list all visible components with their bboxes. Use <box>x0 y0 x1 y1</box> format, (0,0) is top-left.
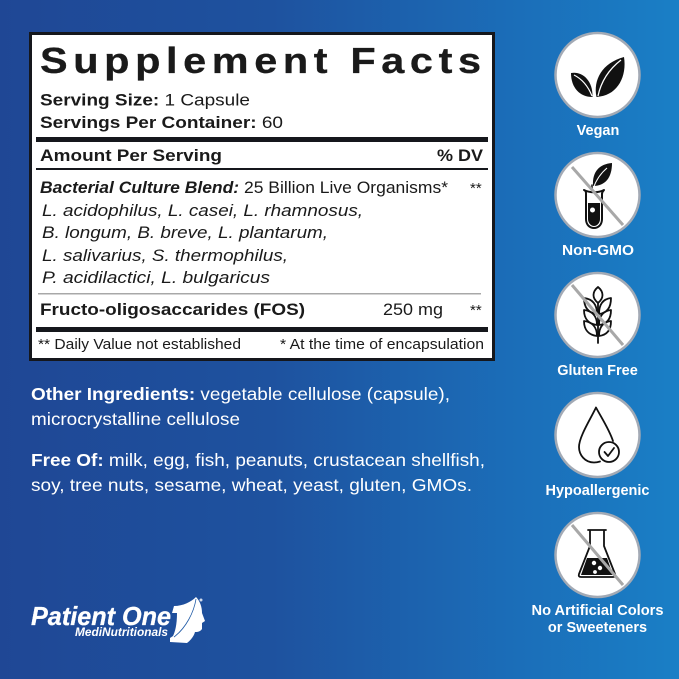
badge: non-GMO <box>556 153 640 259</box>
text block: free of: soy, tree nuts, sesame, wheat, yeast, gluten, GMOs. <box>31 475 472 495</box>
label: no artificial colors or sweeteners: No Artificial Colors <box>532 603 664 619</box>
logo: Patient One MediNutritionals: MediNutritionals <box>75 625 168 639</box>
icon: wheat <box>584 287 611 343</box>
serving size: Serving Size: 1 Capsule <box>40 90 250 110</box>
heading: Supplement Facts: Supplement Facts <box>40 41 481 81</box>
footnote: encapsulation: * At the time of encapsulation <box>280 336 484 353</box>
label: non-GMO: Non-GMO <box>562 243 634 259</box>
servings per container: Servings Per Container: 60 <box>40 113 283 132</box>
strains list: P. acidilactici, L. bulgaricus <box>42 268 271 287</box>
percent daily value header: % DV <box>437 146 484 165</box>
strains list: L. salivarius, S. thermophilus, <box>42 246 288 265</box>
badge: vegan <box>556 33 640 139</box>
label: no artificial colors or sweeteners: or Sweeteners <box>548 620 647 636</box>
label: hypoallergenic: Hypoallergenic <box>546 483 649 499</box>
text block: free of <box>31 450 485 495</box>
panel: supplement facts <box>30 34 494 360</box>
label: no artificial colors or sweeteners <box>532 603 664 636</box>
blend daily value: ** <box>470 180 482 197</box>
FOS amount: 250 mg <box>383 300 443 319</box>
badge: hypoallergenic <box>546 393 649 499</box>
FOS daily value: ** <box>470 302 482 319</box>
label: vegan: Vegan <box>577 123 619 139</box>
label: gluten free: Gluten Free <box>557 363 638 379</box>
text block: other ingredients: microcrystalline cellulose <box>31 409 240 429</box>
icon: flask <box>579 530 615 577</box>
text block: other ingredients: Other Ingredients: vegetable cellulose (capsule), <box>31 384 450 404</box>
FOS row: Fructo-oligosaccarides (FOS) <box>40 300 305 319</box>
badge: gluten free <box>556 273 640 379</box>
logo: Patient One MediNutritionals: Patient One <box>31 601 171 631</box>
icon: test tube with leaf <box>584 163 612 228</box>
bacterial culture blend row: Bacterial Culture Blend: 25 Billion Live Organisms* <box>40 179 449 197</box>
strains list: L. acidophilus, L. casei, L. rhamnosus, <box>42 201 363 220</box>
logo: Patient One MediNutritionals <box>31 597 205 643</box>
amount per serving header: Amount Per Serving <box>40 146 222 165</box>
footnote: daily value: ** Daily Value not established <box>38 336 241 353</box>
strains list <box>42 201 363 287</box>
icon: drop with check <box>579 408 619 462</box>
strains list: B. longum, B. breve, L. plantarum, <box>42 223 328 242</box>
icon: leaves <box>571 57 625 97</box>
text block: other ingredients <box>31 384 450 429</box>
text block: free of: Free Of: milk, egg, fish, peanuts, crustacean shellfish, <box>31 450 485 470</box>
badge: no artificial colors or sweeteners <box>532 513 664 636</box>
